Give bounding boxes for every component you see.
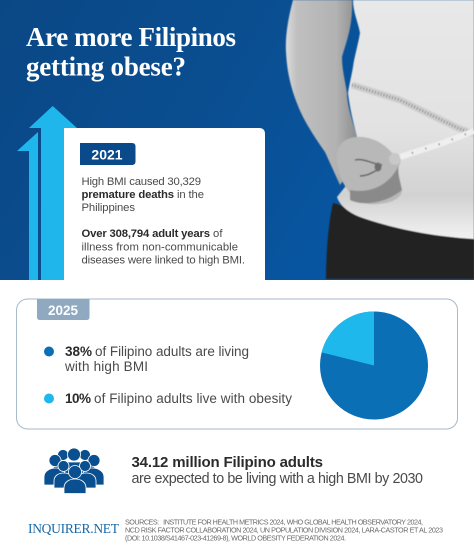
text: adult years of illness <box>82 228 245 266</box>
legend: high BMI: of Filipino adults are living <box>95 344 249 359</box>
title: Are more Filipinos <box>26 22 236 52</box>
fist <box>337 137 402 204</box>
icon: rising arrows <box>17 106 77 280</box>
text: premature deaths: Philippines <box>82 202 135 214</box>
shirt <box>337 0 474 239</box>
legend: high BMI <box>44 344 249 374</box>
text: adult years of illness: Over 308,794 adult years <box>82 228 210 240</box>
hero background panel <box>0 0 474 280</box>
tab: 2025 <box>37 299 90 320</box>
text: adult years of illness: of <box>213 228 223 240</box>
badge: 2021 <box>80 143 136 165</box>
sources: NCD RISK FACTOR COLLABORATION 2024, UN POPULATION DIVISION 2024, LARA-CASTOR ET AL 2023 <box>125 526 443 534</box>
panel: 2025 <box>16 299 458 429</box>
panel: 2021 <box>64 128 265 280</box>
title <box>26 22 236 82</box>
pie chart <box>320 312 428 420</box>
text: adult years of illness: illness from non-communicable <box>82 242 238 254</box>
arm <box>286 0 358 185</box>
title: getting obese? <box>26 52 186 82</box>
callout: 34.12 million: 34.12 million Filipino adults <box>132 454 323 471</box>
legend: high BMI: 38% <box>65 344 92 359</box>
badge: 2021: 2021 <box>91 146 123 162</box>
legend: high BMI: with high BMI <box>64 359 148 374</box>
callout: 34.12 million <box>132 454 423 487</box>
photo: person measuring waist <box>286 0 474 279</box>
trousers <box>326 203 474 279</box>
sources <box>125 518 443 542</box>
sources: (DOI: 10.1038/S41467-023-41269-8), WORLD OBESITY FEDERATION 2024. <box>125 534 346 542</box>
text: premature deaths: High BMI caused 30,329 <box>82 176 201 188</box>
legend: obesity: 10% <box>65 391 91 406</box>
icon: group of people <box>44 448 104 494</box>
logo: INQUIRER.NET: INQUIRER.NET <box>28 521 120 536</box>
text: premature deaths: in the <box>177 189 204 201</box>
sources: SOURCES: INSTITUTE FOR HEALTH METRICS 2024, WHO GLOBAL HEALTH OBSERVATORY 2024, <box>125 518 423 526</box>
callout: 34.12 million: are expected to be living with a high BMI by 2030 <box>132 471 423 487</box>
text: premature deaths: premature deaths <box>82 189 174 201</box>
tab: 2025: 2025 <box>48 303 79 318</box>
legend: obesity: of Filipino adults live with obesity <box>94 391 292 406</box>
text: premature deaths <box>82 176 204 214</box>
measuring tape <box>352 85 474 134</box>
text: adult years of illness: diseases were linked to high BMI. <box>82 254 245 266</box>
